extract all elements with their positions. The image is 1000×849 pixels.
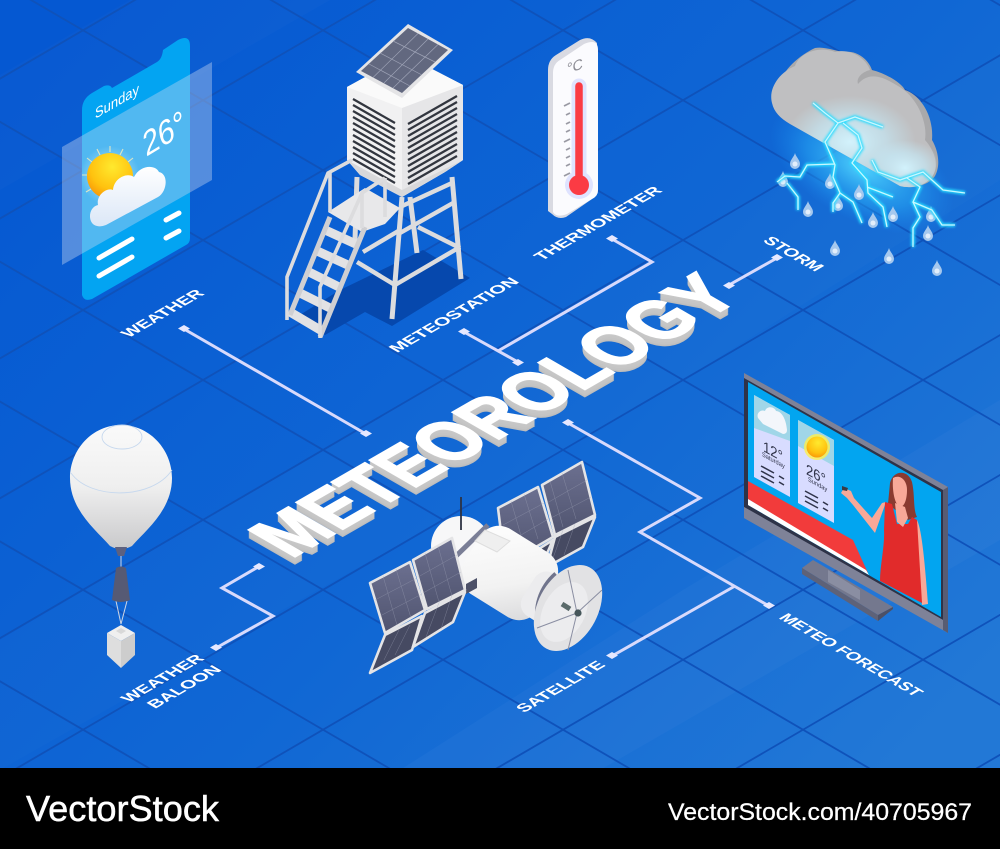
tower legs xyxy=(355,177,461,319)
labels xyxy=(118,184,926,715)
lightning xyxy=(777,103,965,247)
red banner xyxy=(748,481,868,573)
label: weather baloon xyxy=(118,652,226,711)
forecast card sunday: Sunday xyxy=(808,476,828,494)
payload box xyxy=(107,625,135,668)
icon: thermometer xyxy=(548,38,598,218)
rain drops xyxy=(778,153,942,276)
right louvers xyxy=(408,96,457,184)
dish xyxy=(520,553,616,663)
scale ticks xyxy=(564,103,570,176)
icon: weather balloon xyxy=(70,425,172,668)
right solar panels xyxy=(498,462,595,567)
screen xyxy=(748,382,941,617)
forecast card saturday: 12° xyxy=(763,438,783,466)
temperature: 26° xyxy=(139,102,188,164)
icon: satellite xyxy=(370,462,616,673)
ground shadow xyxy=(295,250,470,335)
line: satellite xyxy=(612,586,735,656)
presenter xyxy=(841,473,928,605)
sensor tube xyxy=(112,566,130,602)
cloud light xyxy=(796,101,936,188)
label: storm: STORM xyxy=(759,234,827,274)
forecast card saturday xyxy=(754,395,790,497)
thermometer body xyxy=(548,38,598,218)
app bars xyxy=(99,213,179,276)
footer url: VectorStock.com/40705967 xyxy=(668,799,972,826)
tv bottom bezel xyxy=(744,507,943,630)
label: weather: WEATHER xyxy=(118,287,209,340)
title: METEOROLOGY xyxy=(230,263,758,568)
antenna xyxy=(460,497,462,530)
line: meteostation xyxy=(464,332,518,362)
label: weather baloon: WEATHER xyxy=(118,652,209,705)
label: meteo forecast: METEO FORECAST xyxy=(775,611,926,699)
footer bar xyxy=(0,768,1000,849)
line: weather xyxy=(184,329,366,434)
station box xyxy=(347,55,463,197)
line: thermometer xyxy=(498,239,652,351)
icon: storm cloud xyxy=(771,48,966,276)
balloon seams xyxy=(71,425,172,493)
line: meteo forecast xyxy=(568,423,769,606)
tv frame xyxy=(744,373,948,633)
cloud xyxy=(90,167,166,226)
footer logo: VectorStock xyxy=(26,788,220,829)
left louvers xyxy=(353,99,395,183)
icon: meteostation xyxy=(287,24,470,338)
stairs xyxy=(287,160,385,338)
icon: tv meteo forecast xyxy=(744,373,948,633)
solar panel xyxy=(356,24,453,98)
satellite body xyxy=(431,516,573,629)
tv stand xyxy=(802,560,893,621)
platform xyxy=(328,188,400,232)
strings xyxy=(116,556,127,624)
line: storm xyxy=(729,258,777,285)
valve xyxy=(115,547,127,556)
label: meteostation: METEOSTATION xyxy=(386,275,523,355)
drop highlights xyxy=(780,162,940,274)
cloud back xyxy=(780,48,938,187)
label: weather baloon: BALOON xyxy=(144,663,226,711)
balloon envelope xyxy=(70,425,172,549)
connector lines xyxy=(178,235,783,659)
connector xyxy=(466,578,477,594)
cloud front xyxy=(771,50,936,187)
label: satellite: SATELLITE xyxy=(513,659,610,715)
glow xyxy=(749,75,975,261)
glass panel xyxy=(62,62,212,265)
line end markers xyxy=(178,235,783,659)
label: thermometer: THERMOMETER xyxy=(531,184,667,263)
line: weather balloon xyxy=(216,567,273,648)
degree sign: °C xyxy=(567,55,583,78)
glass tube xyxy=(565,86,593,199)
left solar panels xyxy=(370,538,465,673)
forecast card sunday: 26° xyxy=(806,461,826,489)
forecast card sunday xyxy=(798,420,834,523)
forecast card saturday: Saturday xyxy=(762,451,785,471)
icon: weather app phone xyxy=(62,38,212,300)
phone body xyxy=(82,38,190,300)
sun xyxy=(80,146,140,206)
sunday text: Sunday xyxy=(95,80,139,123)
